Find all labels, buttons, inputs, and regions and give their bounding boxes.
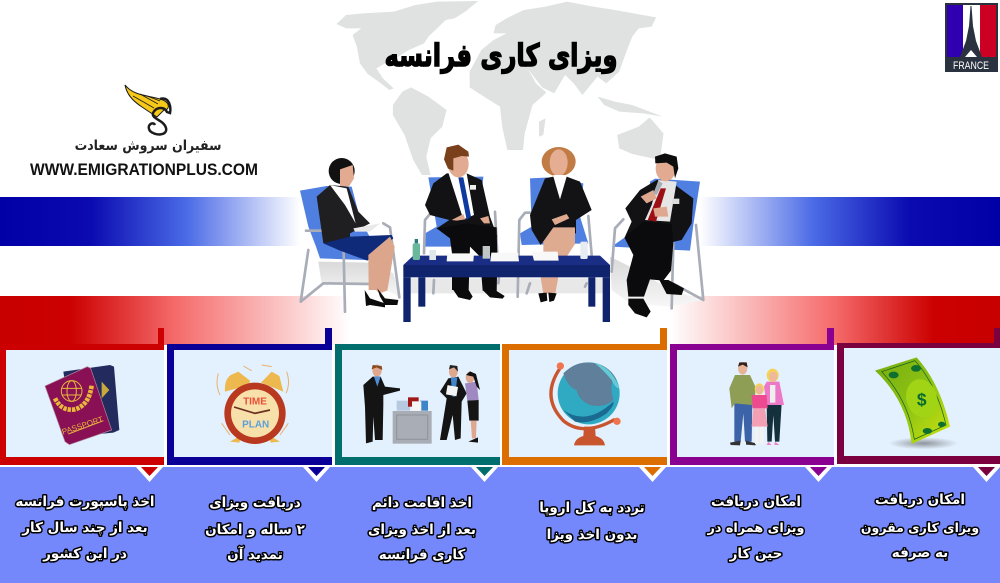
icon: globe [551, 362, 621, 445]
table [403, 239, 610, 322]
logo name: سفیران سروش سعادت [75, 138, 221, 154]
icon: passports: PASSPORT [61, 415, 104, 437]
woman in black suit [518, 147, 592, 302]
caption: دریافت ویزای [209, 495, 301, 511]
pointer triangle [471, 467, 498, 482]
caption: در این کشور [42, 546, 127, 562]
panel discussion illustration [300, 145, 703, 322]
caption: اخذ پاسپورت فرانسه [15, 494, 155, 510]
caption: به صرفه [892, 545, 948, 561]
caption: ۲ ساله و امکان [205, 522, 306, 538]
caption: بعد از چند سال کار [21, 520, 148, 536]
woman taking notes [300, 158, 399, 312]
pointer triangle [136, 467, 163, 482]
caption [861, 492, 979, 561]
panel: French passport [0, 328, 164, 562]
caption [368, 495, 476, 563]
icon: France flag with Eiffel tower: FRANCE [953, 60, 989, 72]
caption [15, 494, 155, 562]
caption: ویزای همراه در [706, 521, 805, 536]
panel: accompanying visa [670, 328, 834, 562]
title: ویزای کاری فرانسه [384, 37, 618, 74]
icon: France flag with Eiffel tower [945, 3, 998, 72]
caption: تمدید آن [227, 546, 283, 563]
icon: dollar bill: $ [917, 389, 927, 409]
pointer triangle [303, 467, 330, 482]
icon: passports [45, 365, 119, 445]
caption: امکان دریافت [711, 494, 801, 510]
caption: حین کار [729, 546, 782, 562]
caption: ویزای کاری مقرون [861, 520, 979, 535]
background stripes [0, 197, 1000, 345]
caption: کاری فرانسه [379, 547, 465, 563]
caption: اخذ اقامت دائم [372, 495, 472, 511]
caption [205, 495, 306, 563]
man with blue tie [424, 145, 505, 300]
pointer triangle [639, 467, 666, 482]
caption [706, 494, 805, 562]
caption: بعد از اخذ ویزای [368, 522, 476, 538]
panel: travel across Europe [502, 328, 667, 543]
logo mark: swan wing [125, 85, 170, 134]
logo: Safiran Soroush Saadat [30, 85, 258, 179]
panel: two-year visa [167, 328, 332, 563]
icon: business people at desk [363, 365, 480, 444]
caption: بدون اخذ ویزا [547, 527, 637, 543]
icon: alarm clock: TIME [243, 397, 267, 408]
website address: WWW.EMIGRATIONPLUS.COM [30, 161, 258, 179]
pointer triangle [805, 467, 832, 482]
icon: alarm clock [217, 365, 289, 444]
icon: alarm clock: PLAN [242, 419, 269, 430]
bottom blue band [0, 467, 1000, 583]
caption: امکان دریافت [875, 492, 965, 508]
world map [336, 1, 663, 175]
panel: permanent residence [335, 344, 500, 563]
panel: affordable work visa [837, 328, 1000, 561]
floor shadows [318, 262, 400, 297]
pointer triangle [973, 467, 1000, 482]
icon: dollar bill [875, 357, 958, 449]
man with microphone and red tie [612, 153, 703, 317]
caption: تردد به کل اروپا [539, 500, 645, 516]
caption [539, 500, 645, 543]
icon: family [729, 362, 784, 445]
